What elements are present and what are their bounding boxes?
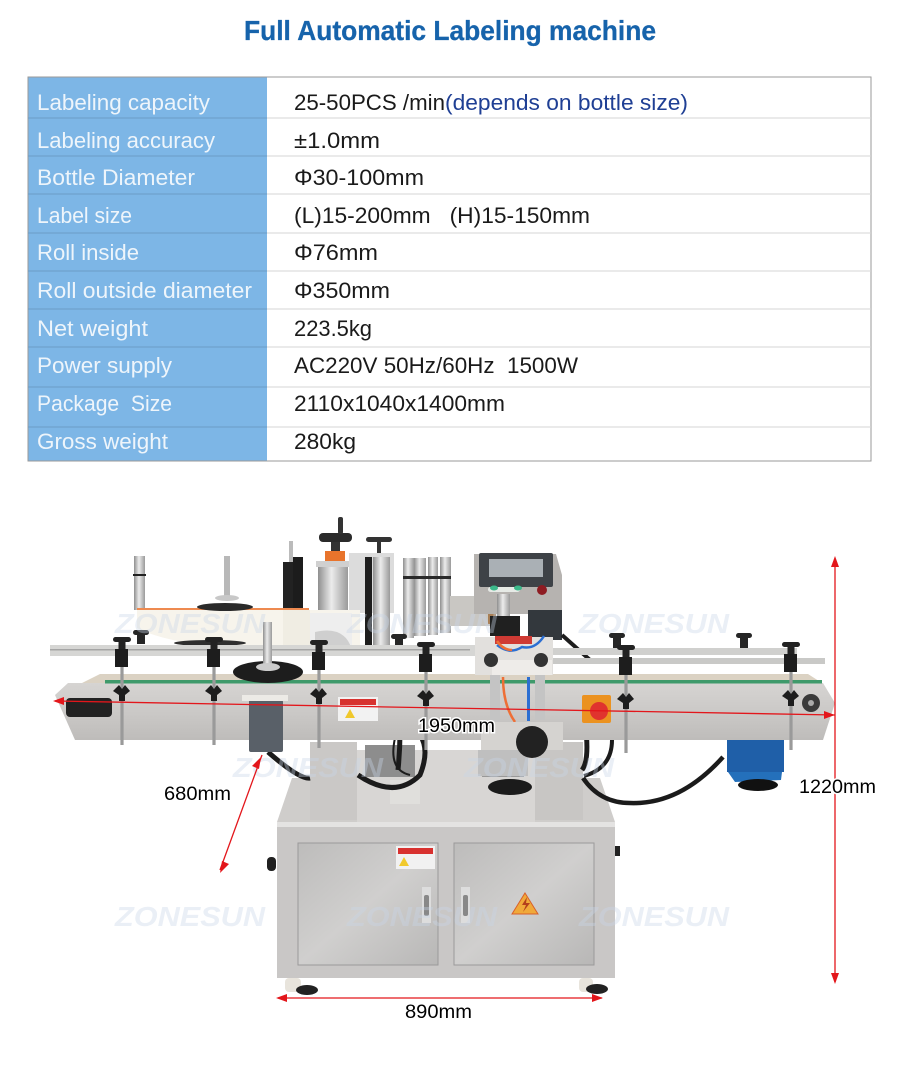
row: bottle diameter: Bottle Diameter (37, 165, 196, 190)
arrow: height dimension (831, 556, 839, 984)
row: roll inside: Φ76mm (294, 240, 378, 265)
row: net weight (37, 316, 372, 341)
row: roll outside diameter (37, 278, 390, 303)
lower cabinet (267, 822, 620, 978)
conveyor body (55, 674, 835, 740)
label roll plate (137, 595, 360, 650)
row: power supply: Power supply (37, 353, 173, 378)
row: roll inside (37, 240, 378, 265)
watermarks: ZONESUN (463, 752, 615, 783)
row: power supply (37, 353, 579, 378)
guide rail posts and clamps (113, 637, 800, 753)
watermarks: ZONESUN (232, 752, 384, 783)
labeling machine illustration (50, 517, 835, 995)
watermarks (114, 608, 730, 932)
row: package size (37, 391, 505, 416)
row: label size: (L)15-200mm (H)15-150mm (294, 203, 590, 228)
row: roll inside: Roll inside (37, 240, 139, 265)
dimension label: 890mm: 890mm (405, 1001, 472, 1023)
row: roll outside diameter: Roll outside diameter (37, 278, 253, 303)
row: labeling capacity: (depends on bottle size) (445, 90, 688, 115)
row: labeling accuracy (37, 128, 380, 153)
dimension label: 680mm: 680mm (164, 783, 231, 805)
watermarks: ZONESUN (346, 901, 498, 932)
row: labeling capacity (37, 90, 688, 115)
side knobs (267, 846, 620, 871)
warning label (338, 697, 378, 721)
table left column background (28, 77, 267, 461)
end wheel (802, 694, 820, 712)
rotating disc and grey sensor (233, 622, 303, 752)
watermarks: ZONESUN (578, 901, 730, 932)
arrow: width dimension (220, 755, 262, 873)
upper labeling head: columns and cylinders (133, 517, 496, 649)
back guide rail clamps (133, 630, 752, 650)
arrow: base dimension (276, 994, 603, 1002)
row: net weight: Net weight (37, 316, 149, 341)
row: gross weight (37, 429, 356, 454)
support pedestals and hoses (268, 690, 723, 834)
row: bottle diameter (37, 165, 424, 190)
row: power supply: AC220V 50Hz/60Hz 1500W (294, 353, 579, 378)
row: label size: Label size (37, 203, 132, 228)
row: gross weight: 280kg (294, 429, 356, 454)
dimension label: 1950mm: 1950mm (418, 715, 495, 737)
door handles (422, 887, 470, 923)
row: package size: 2110x1040x1400mm (294, 391, 505, 416)
electric hazard icon (512, 893, 538, 914)
title: Full Automatic Labeling machine (244, 15, 656, 46)
row: labeling capacity: Labeling capacity (37, 90, 211, 115)
blue conveyor motor (727, 740, 784, 791)
row: net weight: 223.5kg (294, 316, 372, 341)
row: roll outside diameter: Φ350mm (294, 278, 390, 303)
row: labeling capacity: 25-50PCS /min (294, 90, 445, 115)
watermarks: ZONESUN (346, 608, 498, 639)
guide rails (50, 645, 825, 664)
row: label size (37, 203, 590, 228)
row: package size: Package Size (37, 391, 172, 416)
dimension label: 1220mm: 1220mm (799, 776, 876, 798)
row: gross weight: Gross weight (37, 429, 169, 454)
emergency stop button (582, 695, 611, 723)
watermarks: ZONESUN (578, 608, 730, 639)
door warning sticker (396, 846, 435, 869)
casters and feet (285, 978, 608, 995)
row: labeling accuracy: Labeling accuracy (37, 128, 216, 153)
specification table (28, 77, 871, 461)
row: bottle diameter: Φ30-100mm (294, 165, 424, 190)
touch screen control panel (474, 553, 590, 660)
watermarks: ZONESUN (114, 608, 266, 639)
arrow: length dimension (53, 697, 835, 719)
row: labeling accuracy: ±1.0mm (294, 128, 380, 153)
centre adjusting unit (475, 636, 563, 795)
watermarks: ZONESUN (114, 901, 266, 932)
